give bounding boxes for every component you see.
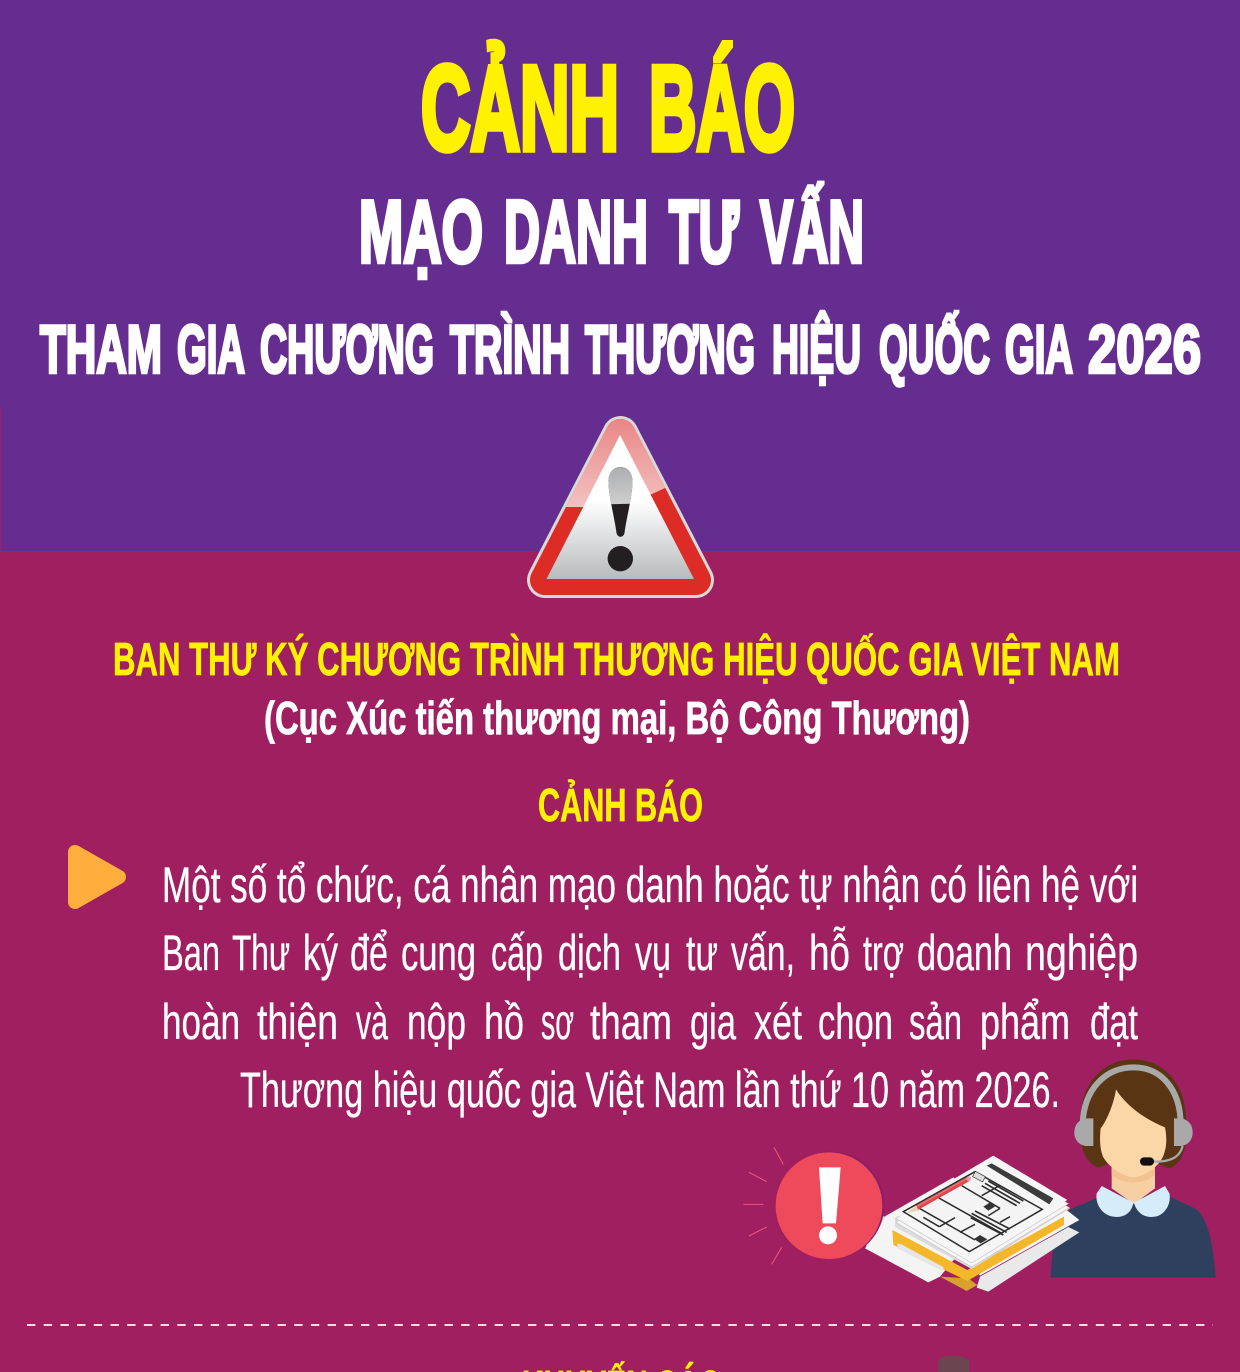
- text block: warning body: chọn: [818, 994, 893, 1050]
- subtitle: programme line: THAM: [40, 312, 162, 388]
- divider: dashed line: [27, 1324, 1213, 1326]
- text block: warning body: vụ: [635, 925, 671, 981]
- text block: warning body: sản: [909, 994, 962, 1050]
- icon: warning triangle: [545, 434, 696, 580]
- icon: consultant woman: [1051, 1059, 1216, 1278]
- panel: magenta body: [0, 551, 1240, 1372]
- subtitle: MẠO DANH TƯ VẤN: VẤN: [760, 182, 864, 281]
- text block: warning body: xét: [754, 994, 802, 1050]
- text block: warning body: đạt: [1090, 994, 1138, 1050]
- icon: orange arrow bullet: [75, 852, 119, 902]
- subtitle: programme line: GIA: [177, 312, 245, 388]
- subtitle: programme line: 2026: [1088, 312, 1201, 388]
- illustration: alert, documents and consultant: [743, 1059, 1216, 1292]
- text block: warning body: hỗ: [809, 925, 850, 981]
- subtitle: programme line: HIỆU: [772, 310, 861, 388]
- text block: warning body: Thư: [232, 925, 290, 981]
- text block: warning body: sơ: [541, 994, 574, 1050]
- icon: partial figure head: [938, 1356, 969, 1372]
- title: CẢNH BÁO: BÁO: [649, 42, 795, 176]
- text block: warning body: doanh: [917, 925, 1012, 981]
- text block: warning body: tham: [590, 994, 672, 1050]
- subtitle: programme line: TRÌNH: [450, 312, 570, 388]
- icon: document stack: [865, 1156, 1079, 1292]
- icon: alert circle: [743, 1147, 884, 1264]
- text block: warning body: thiện: [257, 994, 338, 1050]
- subtitle: programme line: [40, 310, 1201, 388]
- text block: warning body: hoàn: [162, 994, 240, 1050]
- panel: purple header: [0, 0, 1240, 551]
- text block: warning body: gia: [690, 994, 736, 1050]
- text block: warning body: phẩm: [980, 994, 1070, 1050]
- text block: warning body: hồ: [484, 994, 524, 1050]
- text block: warning body: nộp: [407, 994, 466, 1050]
- subheading: agency name: (Cục Xúc tiến thương mại, Bộ Công Thương): [264, 692, 970, 744]
- subtitle: MẠO DANH TƯ VẤN: DANH: [504, 182, 648, 281]
- subtitle: MẠO DANH TƯ VẤN: TƯ: [669, 182, 739, 281]
- text block: warning body: để: [350, 925, 388, 981]
- subtitle: programme line: CHƯƠNG: [260, 312, 434, 388]
- text block: warning body: nghiệp: [1025, 925, 1138, 981]
- subtitle: MẠO DANH TƯ VẤN: MẠO: [359, 182, 483, 281]
- title: CẢNH BÁO: CẢNH: [421, 42, 619, 176]
- text block: warning body: Ban: [162, 925, 220, 981]
- subtitle: programme line: QUỐC: [879, 310, 990, 388]
- text block: warning body: ký: [303, 925, 338, 981]
- subtitle: MẠO DANH TƯ VẤN: [359, 182, 864, 281]
- text block: warning body: và: [356, 994, 388, 1050]
- text block: warning body: tư: [686, 925, 718, 981]
- subtitle: programme line: THƯƠNG: [585, 312, 755, 388]
- text block: warning body: trợ: [863, 925, 904, 981]
- text block: warning body: vấn,: [731, 925, 795, 981]
- text block: warning body: cấp: [491, 925, 543, 981]
- text block: warning body: [162, 857, 1138, 1118]
- heading: warning: CẢNH BÁO: [538, 779, 703, 831]
- text block: warning body: cung: [401, 925, 476, 981]
- subtitle: programme line: GIA: [1005, 312, 1073, 388]
- text block: warning body: dịch: [558, 925, 621, 981]
